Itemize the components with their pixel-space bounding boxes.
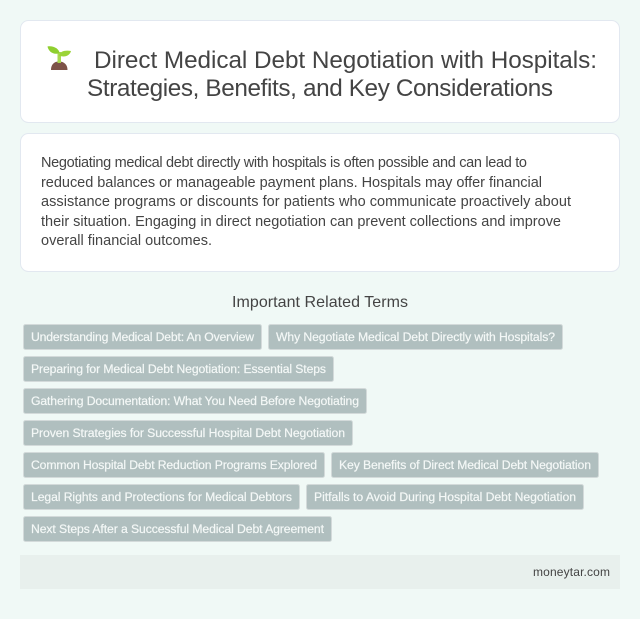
footer bbox=[20, 555, 620, 589]
tag bbox=[24, 516, 332, 542]
tag bbox=[306, 484, 584, 510]
tag: Gathering Documentation: What You Need Before Negotiating bbox=[31, 394, 359, 408]
text block: intro: assistance programs or discounts for patients who communicate proactively about bbox=[41, 194, 571, 210]
tag list bbox=[24, 324, 598, 542]
tag bbox=[24, 484, 300, 510]
text block: intro: reduced balances or manageable payment plans. Hospitals may offer financial bbox=[41, 175, 542, 191]
tag: Common Hospital Debt Reduction Programs Explored bbox=[31, 458, 317, 472]
title: Strategies, Benefits, and Key Considerations bbox=[87, 75, 553, 102]
tag bbox=[268, 324, 562, 350]
tag bbox=[24, 388, 366, 414]
text block: intro: their situation. Engaging in direct negotiation can prevent collections and improve bbox=[41, 214, 561, 230]
tag: Why Negotiate Medical Debt Directly with Hospitals? bbox=[276, 330, 555, 344]
text block: intro: Negotiating medical debt directly with hospitals is often possible and can lead to bbox=[41, 155, 527, 171]
text block: intro: overall financial outcomes. bbox=[41, 233, 212, 249]
title bbox=[87, 47, 597, 102]
tag: Pitfalls to Avoid During Hospital Debt Negotiation bbox=[314, 490, 576, 504]
tag bbox=[24, 356, 334, 382]
panel: intro paragraph bbox=[20, 134, 620, 272]
tag: Understanding Medical Debt: An Overview bbox=[31, 330, 254, 344]
tag: Legal Rights and Protections for Medical Debtors bbox=[31, 490, 292, 504]
tag bbox=[24, 324, 262, 350]
icon: seedling bbox=[48, 46, 71, 70]
tag bbox=[332, 452, 598, 478]
text block: intro bbox=[41, 155, 571, 249]
heading: related terms: Important Related Terms bbox=[232, 294, 408, 311]
title: Direct Medical Debt Negotiation with Hospitals: bbox=[94, 47, 597, 74]
footer source: moneytar.com bbox=[533, 565, 610, 579]
panel: title card bbox=[20, 20, 620, 122]
tag bbox=[24, 452, 324, 478]
tag: Preparing for Medical Debt Negotiation: Essential Steps bbox=[31, 362, 326, 376]
tag bbox=[24, 420, 352, 446]
tag: Key Benefits of Direct Medical Debt Negotiation bbox=[339, 458, 591, 472]
tag: Next Steps After a Successful Medical Debt Agreement bbox=[31, 522, 325, 536]
tag: Proven Strategies for Successful Hospital Debt Negotiation bbox=[31, 426, 345, 440]
